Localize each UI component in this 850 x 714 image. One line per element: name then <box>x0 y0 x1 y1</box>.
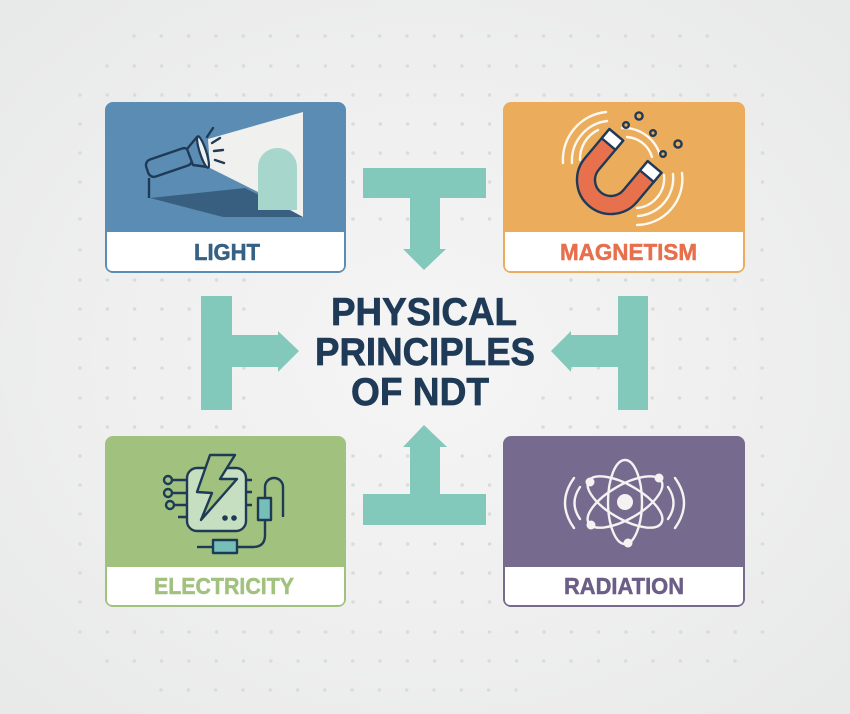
card background <box>503 436 745 607</box>
card background <box>105 436 346 607</box>
label: light: LIGHT <box>194 239 260 265</box>
label band <box>505 567 743 605</box>
panel: magnetism <box>503 102 745 273</box>
arrow: right, from Magnetism and Radiation to centre <box>551 296 648 410</box>
label: electricity: ELECTRICITY <box>154 573 294 599</box>
label band <box>107 567 344 605</box>
label: radiation: RADIATION <box>564 573 684 599</box>
label: magnetism: MAGNETISM <box>560 239 697 265</box>
panel: electricity <box>105 436 346 607</box>
icon: atom with radiating waves <box>565 460 684 548</box>
title: PRINCIPLES <box>315 331 535 374</box>
card background <box>503 102 745 273</box>
icon: flashlight with beam <box>144 112 303 217</box>
icon: circuit chip with lightning bolt <box>164 455 283 553</box>
card background <box>105 102 346 273</box>
arrow: top, from Light and Magnetism to centre <box>363 168 486 270</box>
panel: light <box>105 102 346 273</box>
title <box>315 291 535 414</box>
arrow: bottom, from Electricity and Radiation to centre <box>363 425 486 525</box>
label band <box>505 232 743 271</box>
panel: radiation <box>503 436 745 607</box>
label band <box>107 232 344 271</box>
arrow: left, from Light and Electricity to centre <box>201 296 299 410</box>
icon: horseshoe magnet with field lines <box>563 112 682 228</box>
title: PHYSICAL <box>331 291 517 334</box>
title: OF NDT <box>351 371 489 414</box>
